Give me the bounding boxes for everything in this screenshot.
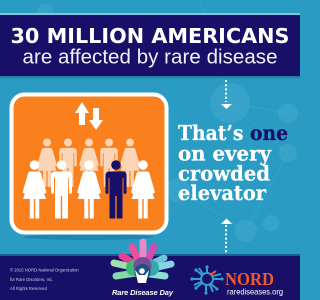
logo text: Rare Disease Day (112, 288, 174, 297)
front row of people (22, 160, 155, 218)
callout text: That’s one (178, 121, 288, 145)
arrow: top dotted (221, 80, 232, 109)
icon: hand (114, 242, 171, 276)
subheading: are affected by rare disease (22, 46, 278, 68)
logo: Rare Disease Day (112, 242, 174, 297)
panel: elevator (12, 94, 166, 240)
icon: up and down arrows (75, 102, 103, 130)
icon: starburst (192, 267, 222, 293)
callout text: elevator (178, 181, 267, 205)
back row of people (37, 139, 140, 187)
logo: NORD (190, 265, 283, 296)
highlighted person (106, 160, 126, 218)
copyright text: All Rights Reserved (10, 286, 47, 291)
callout text (178, 121, 288, 205)
arrow: bottom dotted (221, 218, 232, 254)
copyright text (10, 268, 79, 291)
logo wordmark: NORD (225, 269, 274, 289)
copyright text: © 2015 NORD-National Organization (10, 268, 79, 272)
icon: person in hand (135, 268, 149, 283)
heading: 30 MILLION AMERICANS (10, 24, 290, 48)
website: rarediseases.org (227, 286, 283, 296)
footer band (0, 254, 300, 300)
callout text: crowded (178, 162, 270, 186)
copyright text: for Rare Disorders, Inc. (10, 277, 53, 282)
header band (0, 13, 300, 79)
callout text: on every (178, 142, 272, 166)
